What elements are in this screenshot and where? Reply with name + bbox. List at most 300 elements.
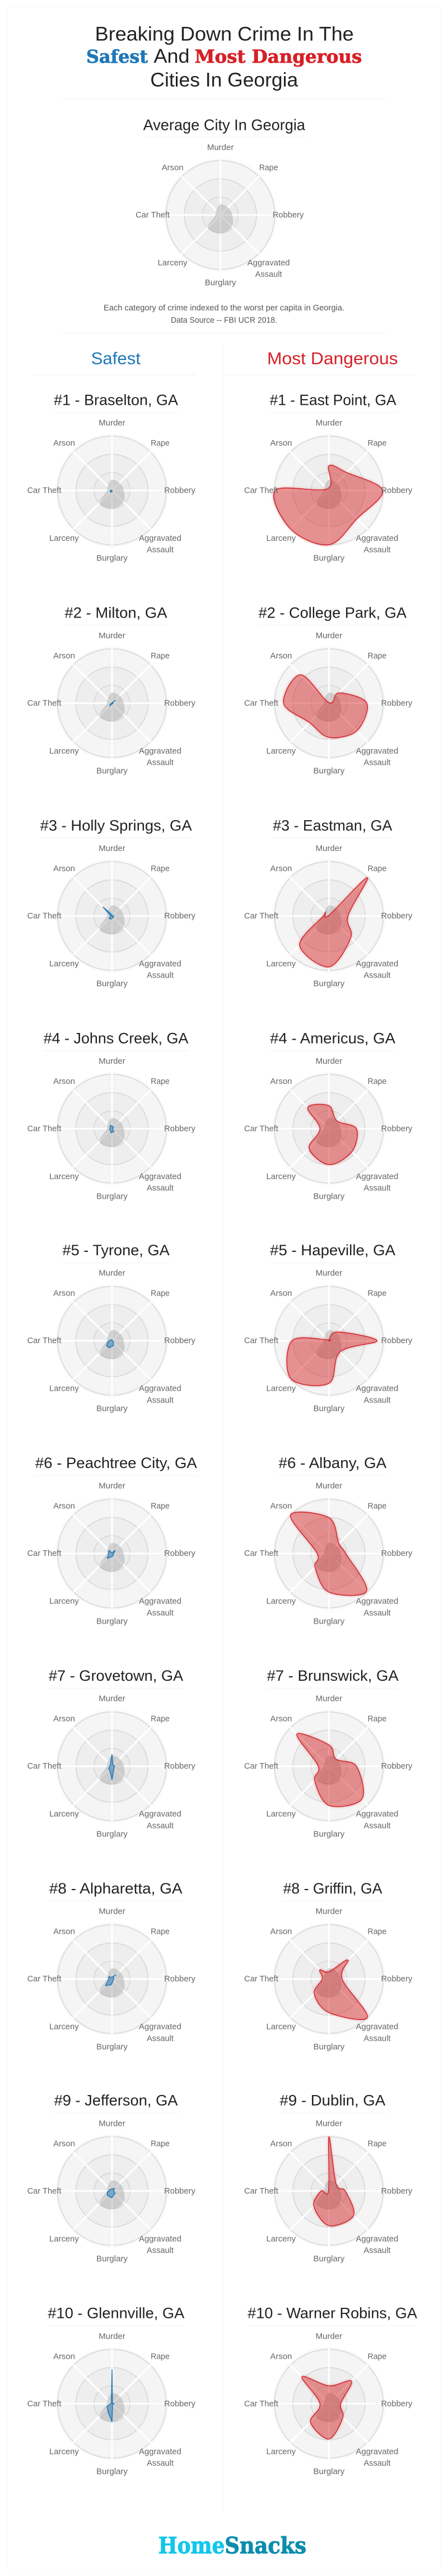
radar chart [244,419,413,563]
axis labels: Burglary [314,1830,345,1839]
radar chart [27,632,196,776]
radar chart [244,1482,413,1626]
data shape [307,1104,357,1165]
data shape [107,1550,115,1558]
panel: #6 Peachtree City [27,1455,197,1626]
axis labels: Larceny [266,2023,296,2032]
logo: HomeSnacks: Snacks [225,2533,306,2559]
axis labels [27,1482,196,1626]
axis labels: Larceny [49,1385,80,1394]
column heading: safest: Safest [91,349,141,368]
axis labels: Arson [270,1715,292,1724]
axis labels: Assault [363,2246,390,2255]
axis labels [244,632,413,776]
heading: average city: Average City In Georgia [143,116,305,134]
note: methodology and data source [104,303,344,325]
radar chart [27,1482,196,1626]
data shape [314,2136,354,2226]
axis labels: Robbery [381,1549,413,1558]
axis labels: Larceny [49,1172,80,1181]
axis labels: Robbery [381,1762,413,1771]
axis labels: Rape [368,652,386,661]
title [86,23,362,91]
axis labels: Robbery [381,1336,413,1345]
axis labels: Car Theft [244,699,278,708]
axis labels: Assault [363,2459,390,2468]
axis labels: Car Theft [244,2400,278,2409]
axis labels: Car Theft [27,1336,61,1345]
axis labels: Murder [207,143,234,152]
data shape [103,907,114,919]
data shape [297,1733,363,1807]
radar chart [244,1269,413,1413]
axis labels: Car Theft [136,211,170,219]
axis labels: Assault [147,2459,174,2468]
axis labels: Aggravated [356,1385,398,1394]
axis labels: Rape [368,1715,386,1724]
panel: #3 Holly Springs [27,817,196,989]
axis labels: Larceny [266,2447,296,2456]
axis labels: Car Theft [244,1336,278,1345]
axis labels: Car Theft [27,1549,61,1558]
axis labels: Car Theft [27,2400,61,2409]
axis labels: Car Theft [244,1762,278,1771]
axis labels: Assault [363,546,390,555]
panel: #5 Hapeville [244,1242,413,1413]
axis labels: Aggravated [356,1597,398,1606]
axis labels: Murder [316,419,342,428]
city title: #2 - Milton, GA [65,604,167,621]
axis labels [27,419,196,563]
title: Most Dangerous [195,46,362,67]
title: Breaking Down Crime In The [95,23,354,45]
city title: #4 - Americus, GA [270,1030,395,1046]
axis labels: Arson [270,1502,292,1511]
radar chart [27,2119,196,2264]
axis labels: Aggravated [139,2023,181,2032]
axis labels: Arson [53,1715,75,1724]
axis labels: Murder [316,2332,342,2341]
axis labels [244,1695,413,1839]
panel: #10 Warner Robins [244,2305,417,2476]
data shape [107,2189,115,2198]
axis labels: Arson [53,1289,75,1298]
axis labels [27,844,196,989]
radar chart [27,419,196,563]
radar chart [27,2332,196,2476]
data shape [273,465,383,545]
data shape [105,1975,116,1986]
axis labels: Assault [147,1821,174,1830]
axis labels: Burglary [96,1830,128,1839]
panel: #10 Glennville [27,2305,196,2476]
city title: #8 - Griffin, GA [283,1880,382,1897]
axis labels: Rape [368,864,386,873]
radar chart [244,1057,413,1201]
axis labels: Rape [368,1502,386,1511]
axis labels: Car Theft [244,1549,278,1558]
axis labels: Robbery [381,2400,413,2409]
axis labels: Larceny [49,2447,80,2456]
axis labels: Robbery [164,699,196,708]
axis labels: Arson [270,864,292,873]
axis labels: Aggravated [356,1172,398,1181]
axis labels: Rape [368,1928,386,1937]
axis labels: Murder [99,1695,125,1704]
axis labels: Aggravated [139,1172,181,1181]
axis labels: Arson [270,2139,292,2148]
axis labels [244,1057,413,1201]
axis labels: Robbery [164,1336,196,1345]
radar chart: average [136,143,304,288]
axis labels [244,419,413,563]
axis labels: Assault [147,1184,174,1193]
city title: #5 - Hapeville, GA [270,1242,395,1259]
axis labels: Rape [151,652,170,661]
axis labels: Aggravated [356,960,398,969]
axis labels: Burglary [314,1404,345,1413]
axis labels: Murder [316,1269,342,1278]
axis labels: Arson [53,1502,75,1511]
axis labels: Rape [368,1289,386,1298]
axis labels: Arson [53,439,75,448]
axis labels: Larceny [266,1597,296,1606]
radar chart [27,1269,196,1413]
axis labels: Aggravated [356,2023,398,2032]
city title: #3 - Holly Springs, GA [40,817,192,834]
axis labels: Rape [368,439,386,448]
axis labels [244,1269,413,1413]
axis labels: Murder [99,1908,125,1916]
radar chart [244,2332,413,2476]
axis labels: Aggravated [139,2234,181,2243]
axis labels: Assault [147,971,174,980]
axis labels: Rape [368,2139,386,2148]
axis labels: Aggravated [139,1597,181,1606]
axis labels: Murder [316,2119,342,2128]
axis labels: Murder [99,419,125,428]
axis labels: Robbery [164,2400,196,2409]
axis labels: Larceny [266,534,296,543]
axis labels: Aggravated [356,1810,398,1819]
axis labels: Burglary [96,2255,128,2264]
city title: #10 - Warner Robins, GA [248,2305,417,2322]
title: And [153,45,189,67]
axis labels: Larceny [49,534,80,543]
axis labels: Burglary [314,2042,345,2051]
axis labels: Car Theft [27,911,61,920]
axis labels: Murder [316,844,342,853]
panel: #8 Alpharetta [27,1880,196,2051]
axis labels: Aggravated [356,2234,398,2243]
axis labels: Larceny [266,747,296,756]
axis labels: Burglary [314,1617,345,1626]
axis labels: Car Theft [27,1124,61,1133]
axis labels: Car Theft [244,1975,278,1984]
axis labels: Rape [151,1502,170,1511]
axis labels [244,1482,413,1626]
axis labels: Burglary [314,554,345,563]
axis labels: Aggravated [139,747,181,756]
data shape [314,1960,367,2019]
city title: #6 - Peachtree City, GA [35,1455,197,1471]
panel: #8 Griffin [244,1880,413,2051]
axis labels: Larceny [158,259,188,268]
radar chart [244,844,413,989]
logo: HomeSnacks [158,2533,306,2559]
axis labels: Aggravated [356,747,398,756]
axis labels: Assault [147,1609,174,1617]
axis labels: Assault [255,270,282,279]
data shape [300,877,368,967]
city title: #8 - Alpharetta, GA [49,1880,183,1897]
panel: #4 Johns Creek [27,1030,196,1201]
axis labels: Rape [259,163,278,172]
axis labels: Rape [151,1077,170,1086]
panel: #9 Jefferson [27,2092,196,2264]
data shape [287,1332,377,1386]
panel: #3 Eastman [244,817,413,989]
axis labels: Assault [363,971,390,980]
axis labels: Rape [151,1289,170,1298]
panel: #2 College Park [244,604,413,776]
axis labels: Car Theft [27,699,61,708]
axis labels: Assault [363,2034,390,2043]
city title: #7 - Grovetown, GA [49,1667,183,1684]
axis labels: Aggravated [139,960,181,969]
axis labels: Car Theft [27,1762,61,1771]
axis labels: Murder [99,632,125,641]
axis labels: Aggravated [139,534,181,543]
city title: #9 - Jefferson, GA [54,2092,178,2109]
city title: #4 - Johns Creek, GA [44,1030,188,1046]
city title: #9 - Dublin, GA [280,2092,385,2109]
city title: #6 - Albany, GA [279,1455,386,1471]
axis labels: Burglary [96,2467,128,2476]
axis labels: Robbery [164,2187,196,2196]
city title: #2 - College Park, GA [259,604,407,621]
axis labels: Rape [151,1928,170,1937]
axis labels: Larceny [266,2234,296,2243]
radar chart [244,1908,413,2051]
radar chart [244,632,413,776]
axis labels: Rape [151,864,170,873]
panel: average city in Georgia [136,116,305,288]
axis labels [244,2332,413,2476]
axis labels: Assault [363,1396,390,1405]
axis labels: Murder [316,1695,342,1704]
panel: #7 Brunswick [244,1667,413,1839]
radar chart [27,1908,196,2051]
panel: #2 Milton [27,604,196,776]
axis labels [244,844,413,989]
axis labels: Arson [270,1077,292,1086]
axis labels: Larceny [266,960,296,969]
axis labels: Arson [270,652,292,661]
axis labels: Arson [53,652,75,661]
axis labels: Assault [147,2034,174,2043]
axis labels: Larceny [49,747,80,756]
axis labels [27,1695,196,1839]
city title: #1 - Braselton, GA [54,391,178,408]
axis labels: Car Theft [244,911,278,920]
panel: #7 Grovetown [27,1667,196,1839]
axis labels: Burglary [96,554,128,563]
logo: HomeSnacks: Home [158,2533,225,2559]
axis labels: Burglary [96,767,128,776]
axis labels: Burglary [314,2255,345,2264]
axis labels: Burglary [314,1193,345,1201]
data shape [302,2376,352,2439]
panel: #1 East Point [244,391,413,563]
panel: #4 Americus [244,1030,413,1201]
axis labels: Aggravated [248,259,290,268]
column heading: most dangerous: Most Dangerous [267,349,398,368]
title: Safest [86,46,148,67]
radar chart [27,844,196,989]
axis labels: Robbery [164,911,196,920]
axis labels: Assault [363,759,390,768]
axis labels: Car Theft [27,1975,61,1984]
axis labels: Robbery [381,1124,413,1133]
axis labels: Burglary [96,1404,128,1413]
axis labels: Robbery [164,1975,196,1984]
axis labels: Larceny [49,2234,80,2243]
axis labels: Assault [363,1821,390,1830]
data shape [283,675,367,738]
panel: #9 Dublin [244,2092,413,2264]
axis labels [27,1269,196,1413]
data shape [110,1125,114,1133]
axis labels: Burglary [96,1193,128,1201]
axis labels: Aggravated [139,1385,181,1394]
city title: #10 - Glennville, GA [48,2305,184,2322]
axis labels: Robbery [164,1124,196,1133]
axis labels: Robbery [164,1549,196,1558]
axis labels: Burglary [96,1617,128,1626]
axis labels: Murder [99,1269,125,1278]
radar chart [27,1695,196,1839]
axis labels: Arson [53,864,75,873]
axis labels: Rape [151,2139,170,2148]
axis labels: Robbery [381,911,413,920]
axis labels: Murder [99,2119,125,2128]
note: methodology and data source: Data Source -- FBI UCR 2018. [171,316,277,325]
panel: #1 Braselton [27,391,196,563]
axis labels: Assault [363,1609,390,1617]
panel: #5 Tyrone [27,1242,196,1413]
data shape [110,700,115,706]
data shape [107,2370,114,2421]
axis labels [136,143,304,288]
axis labels: Burglary [314,980,345,989]
axis labels: Burglary [96,2042,128,2051]
axis labels: Larceny [266,1172,296,1181]
axis labels: Rape [151,2352,170,2361]
axis labels: Rape [368,1077,386,1086]
axis labels: Rape [151,1715,170,1724]
axis labels: Robbery [273,211,304,219]
data shape [291,1512,367,1596]
axis labels: Larceny [49,1597,80,1606]
axis labels: Arson [53,2139,75,2148]
axis labels: Arson [53,2352,75,2361]
data shape [109,1755,115,1780]
note: methodology and data source: Each category of crime indexed to the worst per capita in Georgia. [104,303,344,313]
axis labels: Larceny [49,960,80,969]
axis labels: Burglary [314,767,345,776]
axis labels: Murder [99,1482,125,1491]
axis labels: Arson [162,163,184,172]
city title: #3 - Eastman, GA [273,817,392,834]
radar chart [27,1057,196,1201]
data shape [106,1340,114,1348]
axis labels: Arson [270,2352,292,2361]
axis labels: Murder [99,844,125,853]
axis labels: Robbery [381,486,413,495]
axis labels [27,2119,196,2264]
axis labels: Robbery [381,2187,413,2196]
axis labels: Murder [99,1057,125,1066]
axis labels: Larceny [266,1810,296,1819]
axis labels: Car Theft [27,2187,61,2196]
axis labels: Car Theft [27,486,61,495]
axis labels: Burglary [205,279,236,288]
axis labels: Burglary [314,2467,345,2476]
axis labels: Arson [270,439,292,448]
axis labels: Arson [53,1077,75,1086]
axis labels: Car Theft [244,486,278,495]
axis labels: Aggravated [139,1810,181,1819]
axis labels: Car Theft [244,1124,278,1133]
axis labels [244,2119,413,2264]
radar chart [244,2119,413,2264]
city title: #7 - Brunswick, GA [267,1667,399,1684]
radar chart [244,1695,413,1839]
axis labels: Rape [151,439,170,448]
axis labels: Robbery [164,1762,196,1771]
city title: #5 - Tyrone, GA [63,1242,170,1259]
axis labels: Rape [368,2352,386,2361]
axis labels: Assault [147,759,174,768]
axis labels: Assault [147,2246,174,2255]
axis labels: Murder [99,2332,125,2341]
axis labels [27,2332,196,2476]
axis labels: Car Theft [244,2187,278,2196]
axis labels: Arson [53,1928,75,1937]
axis labels: Robbery [381,1975,413,1984]
city title: #1 - East Point, GA [270,391,396,408]
axis labels: Assault [363,1184,390,1193]
data shape [110,490,112,492]
axis labels: Aggravated [139,2447,181,2456]
axis labels: Assault [147,546,174,555]
axis labels: Arson [270,1289,292,1298]
title: Cities In Georgia [150,69,298,91]
panel: #6 Albany [244,1455,413,1626]
axis labels: Aggravated [356,534,398,543]
axis labels: Robbery [381,699,413,708]
axis labels: Murder [316,632,342,641]
axis labels: Aggravated [356,2447,398,2456]
axis labels: Burglary [96,980,128,989]
axis labels: Robbery [164,486,196,495]
axis labels [244,1908,413,2051]
axis labels: Murder [316,1482,342,1491]
axis labels [27,632,196,776]
axis labels: Larceny [49,1810,80,1819]
axis labels: Assault [147,1396,174,1405]
